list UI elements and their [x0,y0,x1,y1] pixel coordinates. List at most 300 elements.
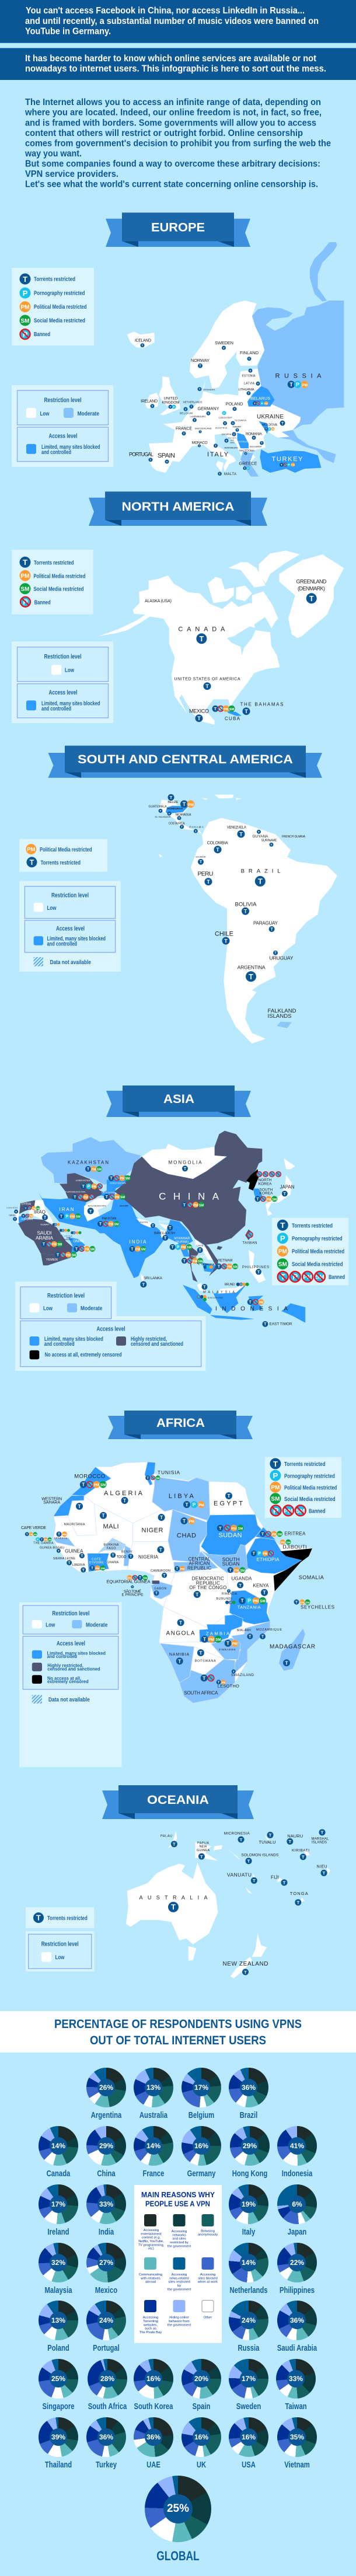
legend: North America icons [12,550,93,615]
legend: South America levels [19,881,121,972]
legend: Europe icons: Pornography restricted [34,291,85,297]
Suriname: T [270,843,273,847]
legend: North America icons: PM [21,573,29,580]
Ethiopia [251,1551,280,1562]
Central African Republic: CENTRAL [188,1556,211,1562]
reason: sites blocked at work: Accessing [200,2273,215,2277]
Italy: ITALY [207,451,229,458]
Algeria: T [123,1498,127,1503]
United Arab Emirates: UNITED [64,1235,72,1237]
Chile [215,931,233,944]
reason: government networks: and sites [172,2238,186,2241]
donut: Indonesia: 41% [290,2142,304,2150]
Sudan [217,1525,244,1539]
United Kingdom: KINGDOM [162,401,180,405]
Namibia [169,1653,189,1664]
legend: South America icons: Torrents restricted [41,860,81,866]
legend: South America levels: Limited, many sites blocked [47,936,106,943]
reason: government networks [167,2214,191,2248]
Chad: PM [189,1520,194,1524]
donut: Singapore: 25% [51,2375,65,2383]
Lesotho: T [218,1681,220,1684]
Taiwan: TAIWAN [243,1241,257,1245]
legend: Africa icons: P [273,1506,278,1515]
Tajikistan [101,1191,125,1200]
panel: Africa map [21,1462,334,1703]
legend: Oceania icons [26,1907,94,1928]
Iran: PM [70,1215,75,1219]
Iran: T [60,1215,63,1219]
Mozambique [256,1628,282,1639]
Djibouti: DJIBOUTI [282,1544,307,1550]
Oman: PM [85,1248,90,1251]
Portugal [129,452,153,462]
Equatorial Guinea: PM [127,1577,132,1580]
donut: Indonesia: Indonesia [282,2169,312,2179]
Chile: CHILE [215,931,233,938]
Micronesia [224,1832,250,1843]
donut: USA: USA [242,2460,256,2470]
Yemen: PM [66,1254,71,1257]
Tunisia: SM [156,1477,160,1479]
donut: Sweden: Sweden [236,2402,261,2411]
Bahrain: QATAR [60,1233,67,1235]
Belarus: PM [264,403,268,405]
legend: Asia levels: No access at all, extremely censored [45,1352,122,1358]
donut: South Korea [134,2359,173,2411]
Turkey: PM [291,464,295,466]
reason: news sites: the government [167,2288,191,2291]
Papua New Guinea: GUINEA [197,1849,210,1852]
New Zealand [223,1961,268,1975]
Tajikistan: SM [120,1196,125,1199]
donut: South Africa [88,2359,127,2411]
Venezuela: VENEZUELA [227,826,246,830]
Bolivia: T [244,909,247,914]
Cote d'Ivoire [89,1558,106,1570]
donut: Russia: 24% [242,2316,256,2324]
donut: India: 33% [99,2200,113,2208]
India: SM [141,1248,146,1251]
Mongolia: T [184,1167,187,1171]
Zambia: T [203,1636,207,1642]
Netherlands [183,401,202,409]
intro paragraph: Let's see what the world's current state concerning online censorship is. [25,180,318,189]
Peru [197,871,214,885]
United Arab Emirates: EMIRATES [64,1239,72,1241]
donut: Poland: Poland [47,2343,69,2353]
Bangladesh [154,1232,175,1241]
New Zealand: T [244,1970,247,1975]
Montenegro: MONTENEGRO [224,447,238,449]
donut: China: China [97,2169,116,2179]
reason: government networks: the government [167,2245,191,2248]
Saudi Arabia: ARABIA [36,1235,53,1241]
South Korea [254,1188,277,1202]
The Bahamas: T [245,708,248,714]
Bhutan [159,1220,173,1231]
donut: Singapore [39,2359,78,2411]
Liberia: T [82,1568,85,1572]
Burkina Faso: FASO [107,1547,116,1550]
Luxembourg [190,415,205,422]
donut: Global: GLOBAL [156,2549,200,2563]
legend: Asia levels [15,1282,205,1371]
Belgium: T [184,408,187,411]
Monaco: T [198,445,200,447]
Nieu: NIEU [317,1865,327,1869]
Saudi Arabia [36,1230,62,1247]
Denmark: T [198,388,201,391]
Falkland Islands: ISLANDS [267,1013,292,1020]
Oman: OMAN [74,1240,84,1244]
Papua New Guinea [197,1841,210,1859]
Central African Republic: T [176,1567,178,1571]
legend: Asia icons: Social Media restricted [292,1262,343,1268]
ribbon heading: Africa: AFRICA [156,1416,205,1430]
Thailand: THAILAND [191,1255,206,1259]
Greenland: T [309,595,314,603]
Uruguay: T [274,952,277,955]
Tunisia: T [146,1477,149,1480]
Moldova: T [266,427,267,431]
legend: Europe levels: Low [40,411,50,417]
South Sudan: PM [234,1569,239,1573]
Norway: T [199,365,201,368]
East Timor: T [264,1322,267,1327]
legend: South America icons: PM [27,847,36,853]
legend: North America levels: Low [65,668,74,674]
Micronesia: MICRONESIA [224,1832,250,1836]
donut: Poland [39,2301,78,2353]
Ghana: GHANA [107,1561,118,1564]
reason: entertainment [138,2214,165,2251]
reason: torrenting: websites, [143,2323,158,2327]
Syria: SM [36,1207,40,1210]
Cameroon [151,1569,170,1578]
donut: Belgium: 17% [194,2083,208,2092]
Costa Rica: COSTA RICA [169,822,185,825]
The Gambia: T [41,1538,43,1541]
Tajikistan: TAJIKISTAN [101,1191,115,1193]
map shapes: South and Central America [159,795,337,1043]
legend: Europe icons: Social Media restricted [34,317,85,324]
Guinea: GUINEA [65,1548,83,1554]
reason: anonymous browsing [198,2214,218,2237]
Suriname [261,839,277,847]
Equatorial Guinea: EQUATORIAL GUINEA [106,1579,151,1584]
Tanzania: PM [253,1600,259,1604]
Libya [169,1493,205,1508]
intro paragraph: and is framed with borders. Some governments will allow you to access [25,118,316,128]
donut: Turkey: 36% [99,2433,113,2441]
Macedonia: T [245,452,247,455]
Djibouti [280,1540,307,1550]
Indonesia: T [249,1300,252,1305]
Sierra Leone [53,1557,76,1565]
Honduras: HONDURAS [167,807,183,810]
Nepal [140,1221,155,1228]
Peru: PERU [197,871,214,878]
Central African Republic [174,1556,211,1571]
donut: Australia [134,2068,173,2120]
legend: South America levels: Access level [56,926,85,933]
Greece: T [244,467,246,470]
Myanmar: P [177,1245,180,1249]
Belgium [180,407,193,415]
Kazakhstan: KAZAKHSTAN [68,1160,109,1165]
Oman [74,1240,95,1252]
South Korea: T [256,1198,259,1202]
map shapes: Asia [13,1131,305,1323]
reason: sites blocked at work: when at work [197,2281,218,2284]
Latvia: T [257,382,259,386]
donut: Australia: 13% [146,2083,160,2092]
Tanzania: P [247,1598,251,1604]
Spain: SPAIN [158,452,175,459]
Greece: P [247,467,249,470]
East Timor [262,1321,292,1327]
Tajikistan: T [106,1195,109,1199]
United States [174,677,240,690]
Nieu: T [323,1870,326,1876]
Vanuatu: T [253,1878,256,1883]
legend: Africa icons: SM [296,1507,305,1514]
donut: Belgium [182,2068,221,2120]
Czech Republic [218,411,232,419]
Czech Republic: P [223,411,225,415]
Kenya: T [263,1590,266,1596]
Botswana: BOTSWANA [195,1660,216,1663]
Marshal Islands [312,1829,329,1844]
Solomon Islands: T [247,1858,250,1863]
donut: Italy [229,2184,268,2237]
Sao Tome and Principe: E PRÍNCIPE [121,1592,144,1597]
Canada: T [200,635,204,643]
Oman: T [75,1248,78,1251]
Libya: LIBYA [169,1493,194,1500]
Central African Republic: AFRICAN [189,1561,210,1566]
Poland: T [233,407,236,411]
Uganda: UGANDA [231,1576,252,1582]
legend: Africa levels: Limited, many sites blocked [47,1650,106,1656]
Paraguay: T [270,928,273,931]
Uruguay [270,951,294,961]
Libya: P [193,1502,196,1507]
ribbon heading: South and Central America: SOUTH AND CENTRAL AMERICA [78,753,293,766]
donut: UAE [134,2417,173,2470]
Syria: SYRIA [21,1203,32,1206]
donut: Italy: Italy [242,2227,255,2237]
donut: UAE: 36% [146,2433,160,2441]
Kirgyzstan: T [110,1177,113,1181]
Estonia [242,369,256,378]
Guinea-Bissau: GUINEA-BISSAU [40,1546,64,1549]
Russia: P [296,382,299,388]
legend: Europe icons: T [23,275,27,284]
legend: Europe levels: Access level [49,433,77,440]
Seychelles: PM [300,1601,304,1604]
legend: Africa icons: Social Media restricted [284,1496,336,1503]
Burkina Faso [104,1544,119,1550]
New Zealand: NEW ZEALAND [223,1961,268,1967]
reason: torrenting: such as [145,2327,156,2331]
donut: Brazil [229,2068,268,2120]
Equatorial Guinea: T [139,1576,141,1580]
Guinea-Bissau [40,1546,64,1553]
legend: Africa levels: Data not available [48,1697,90,1703]
Guyana: T [258,830,260,834]
Western Sahara: WESTERN [41,1498,62,1502]
Yemen: SM [71,1254,76,1257]
Eritrea: ERITREA [284,1531,306,1537]
Djibouti: SM [286,1541,291,1545]
Central African Republic: REPUBLIC [187,1565,211,1570]
Kirgyzstan: PM [120,1177,125,1181]
map shapes: North America [99,550,344,725]
donut: Thailand: Thailand [45,2460,72,2470]
legend: Africa icons: P [273,1471,278,1480]
legend: South America levels: Low [47,905,57,912]
Zambia: PM [208,1638,214,1642]
Russia: T [289,382,293,388]
Nieu [317,1865,327,1876]
Iran: SM [76,1215,81,1219]
Nigeria: NIGERIA [138,1554,159,1559]
Ethiopia: T [253,1552,256,1556]
Malaysia: MALAYSIA [203,1290,235,1294]
legend: Asia levels: Restriction level [47,1292,85,1299]
Morocco: PM [94,1484,99,1488]
Mexico [189,708,209,722]
legend: Africa icons [265,1457,341,1518]
donut: USA: 16% [242,2433,256,2441]
Central African Republic: PM [180,1568,184,1571]
legend: Europe levels: Restriction level [44,397,82,404]
Cuba: P [219,706,222,711]
Fiji [271,1875,287,1886]
intro paragraph: The Internet allows you to access an infinite range of data, depending on [25,97,321,107]
donut: Germany [182,2126,221,2179]
donut: Poland: 13% [51,2316,65,2324]
DR Congo: REPUBLIC [196,1580,220,1586]
reason: entertainment: Accessing [144,2229,159,2232]
Indonesia: PM [259,1301,264,1305]
Mongolia [168,1160,202,1171]
Panama: T [195,830,197,833]
Sierra Leone: SIERRA LEONE [53,1557,76,1561]
Kiribati: T [302,1854,305,1859]
Israel: ISRAEL [9,1214,17,1216]
Turkey [272,456,303,467]
intro paragraph: where you are located. Indeed, our online freedom is not, in fact, so free, [25,107,322,118]
Suriname: SURINAME [261,839,277,843]
Russia: RUSSIA [275,372,322,379]
Senegal: PM [62,1533,67,1537]
donut: Hong Kong [230,2126,270,2179]
donut: Sweden [229,2359,268,2411]
Myanmar: MYANMAR [174,1237,190,1241]
Burkina Faso: BURKINA [104,1544,119,1547]
The Gambia: PM [44,1538,47,1541]
Burundi: BURUNDI [216,1597,232,1601]
Canada [178,626,225,644]
Jordan [21,1214,33,1221]
ribbon heading: Africa [108,1411,253,1439]
legend: Asia icons: PM [303,1274,312,1281]
Pakistan: T [99,1222,102,1227]
Senegal: T [58,1533,60,1537]
Madagascar: T [285,1660,288,1666]
Falkland Islands: FALKLAND [267,1008,296,1014]
legend: Europe icons: P [23,330,28,338]
Iran: P [65,1215,68,1219]
Eritrea: T [261,1533,264,1537]
Zambia: SM [215,1638,221,1642]
Australia: T [171,1903,176,1911]
Germany: GERMANY [197,406,219,411]
Malawi: T [249,1635,252,1639]
Philippines: T [257,1270,260,1275]
Marshal Islands: ISLANDS [312,1841,327,1844]
donut: Saudi Arabia: Saudi Arabia [277,2343,317,2353]
Togo [110,1552,127,1559]
United Kingdom: UNITED [163,397,178,401]
Bosnia and Herzegovina [224,437,236,444]
Yemen [46,1252,76,1262]
Falkland Islands [267,1008,296,1020]
United Arab Emirates: ARAB [67,1237,71,1239]
Senegal [54,1531,68,1540]
Greece: GREECE [239,461,257,466]
donut: Germany: 16% [194,2142,208,2150]
legend: Africa icons: Pornography restricted [284,1473,335,1479]
donut: Mexico: 27% [99,2259,113,2267]
Marshal Islands: MARSHAL [312,1837,329,1841]
Ukraine [257,414,285,426]
reason: government networks: networks [172,2233,186,2237]
Iran: IRAN [60,1207,74,1212]
Tajikistan: PM [115,1196,120,1199]
Papua New Guinea: PAPUA [197,1841,209,1845]
donut: Argentina [86,2068,126,2120]
Cuba: CUBA [225,716,240,721]
Slovakia: T [232,422,234,425]
Panama [189,825,203,833]
Mali: MALI [103,1523,119,1530]
legend: North America levels: Limited, many sites blocked [41,700,100,707]
Uzbekistan: P [88,1185,90,1189]
Mexico: MEXICO [189,708,209,714]
Bosnia and Herzegovina: AND [231,439,235,442]
Taiwan [243,1232,257,1245]
intro paragraph: comes from government's decision to prohibit you from surfing the web the [25,139,331,148]
legend: Africa levels: Highly restricted, [47,1663,83,1669]
donut: Thailand [39,2417,78,2470]
Laos [197,1244,204,1253]
Cape Verde [21,1526,46,1536]
Gabon [154,1587,166,1596]
Iceland [135,339,151,347]
Vanuatu [227,1872,257,1884]
Sao Tome and Principe: SÃO TOMÉ [124,1589,142,1594]
Iraq: IRAQ [34,1209,46,1214]
legend: Europe icons: Political Media restricted [34,304,86,310]
Libya: T [185,1502,189,1507]
Swaziland [231,1669,254,1677]
Pakistan: SM [114,1223,119,1227]
Sao Tome and Principe: T [132,1586,134,1588]
